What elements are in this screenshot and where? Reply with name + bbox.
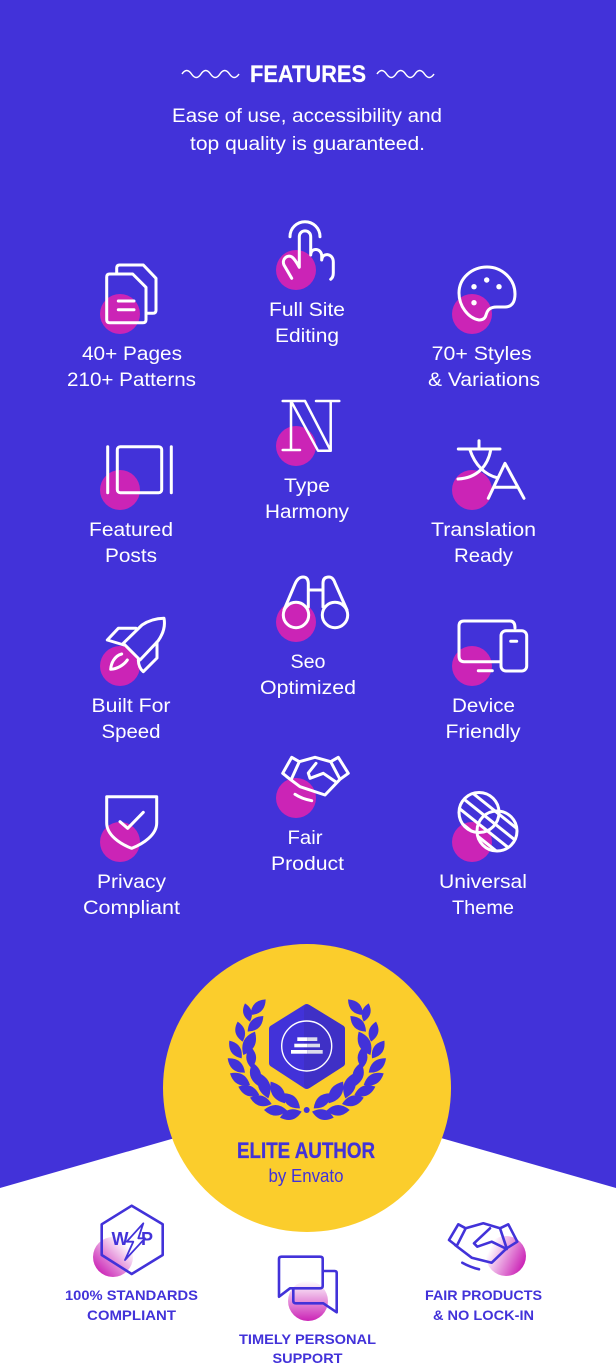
label: 210+ Patterns	[67, 370, 196, 391]
label: Harmony	[265, 502, 350, 523]
icon: pointing hand	[276, 222, 333, 290]
feature: type harmony	[265, 401, 350, 523]
label	[439, 872, 527, 919]
subtitle	[172, 106, 442, 155]
label: Speed	[102, 722, 160, 743]
label	[428, 344, 540, 391]
benefit: fair products	[425, 1223, 542, 1323]
label: Posts	[105, 546, 157, 567]
icon: hatched circles	[452, 791, 518, 862]
icon: handshake	[276, 757, 348, 818]
label: Compliant	[83, 898, 181, 919]
badge subtitle: by Envato	[268, 1166, 344, 1186]
label: Translation	[431, 520, 536, 541]
label: Product	[271, 854, 345, 875]
feature: featured posts	[89, 447, 173, 567]
icon: WordPress lightning hexagon: W	[112, 1229, 128, 1249]
feature: built for speed	[92, 618, 171, 743]
label	[65, 1287, 198, 1323]
label: Theme	[452, 898, 514, 919]
feature: device friendly	[446, 621, 527, 743]
label: Friendly	[446, 722, 521, 743]
icon: serif letter N	[276, 401, 339, 466]
header	[172, 61, 442, 155]
icon: left laurel	[228, 999, 302, 1120]
feature: full site editing	[269, 222, 345, 347]
icon: WordPress lightning hexagon: P	[141, 1229, 153, 1249]
icon: handshake	[449, 1223, 526, 1276]
label: Full Site	[269, 300, 345, 321]
feature: seo optimized	[260, 577, 356, 699]
label: 100% STANDARDS	[65, 1287, 198, 1303]
label: & Variations	[428, 370, 540, 391]
label: Type	[284, 476, 330, 497]
label: Device	[452, 696, 515, 717]
label: Ready	[454, 546, 514, 567]
feature: fair product	[271, 757, 348, 875]
label: Seo	[290, 652, 326, 673]
label: Featured	[89, 520, 173, 541]
badge title: ELITE AUTHOR	[237, 1138, 375, 1163]
label	[446, 696, 521, 743]
label	[271, 828, 345, 875]
label: Editing	[275, 326, 339, 347]
title	[182, 61, 434, 88]
icon: binoculars	[276, 577, 348, 642]
label: Fair	[288, 828, 323, 849]
elite author badge	[163, 944, 451, 1232]
yellow circle	[163, 944, 451, 1232]
label: 70+ Styles	[432, 344, 532, 365]
label	[265, 476, 350, 523]
subtitle: top quality is guaranteed.	[190, 134, 425, 155]
icon: translate	[452, 441, 524, 510]
icon: carousel frame	[100, 447, 171, 510]
icon: rocket	[100, 618, 164, 686]
laurel dot	[304, 1107, 310, 1113]
label	[260, 652, 356, 699]
feature: privacy compliant	[83, 797, 181, 919]
label: Universal	[439, 872, 527, 893]
label: Built For	[92, 696, 171, 717]
feature: pages and patterns	[67, 265, 196, 391]
label: Optimized	[260, 678, 356, 699]
label: FAIR PRODUCTS	[425, 1287, 542, 1303]
icon: monitor and phone	[452, 621, 527, 686]
label	[67, 344, 196, 391]
label: COMPLIANT	[87, 1307, 176, 1323]
icon: shield	[100, 797, 157, 862]
label	[425, 1287, 542, 1323]
icon: right laurel	[312, 999, 386, 1120]
label: Privacy	[97, 872, 167, 893]
label	[89, 520, 173, 567]
label	[92, 696, 171, 743]
feature: universal theme	[440, 791, 526, 914]
label	[431, 520, 536, 567]
benefit: standards compliant	[65, 1206, 198, 1323]
icon: speech bubbles	[279, 1257, 337, 1321]
benefit: personal support	[239, 1257, 376, 1364]
icon: hexagon emblem	[273, 1008, 341, 1085]
label	[83, 872, 181, 919]
title: FEATURES	[250, 61, 366, 88]
label	[239, 1331, 376, 1364]
white bottom section	[0, 1100, 616, 1364]
subtitle: Ease of use, accessibility and	[172, 106, 442, 127]
feature: styles and variations	[428, 267, 540, 391]
label: TIMELY PERSONAL	[239, 1331, 376, 1347]
label: & NO LOCK-IN	[433, 1307, 534, 1323]
feature: translation ready	[431, 441, 536, 567]
label: 40+ Pages	[82, 344, 182, 365]
icon: documents	[100, 265, 156, 334]
icon: WordPress lightning hexagon	[93, 1206, 163, 1277]
label	[269, 300, 345, 347]
icon: palette	[452, 267, 515, 334]
